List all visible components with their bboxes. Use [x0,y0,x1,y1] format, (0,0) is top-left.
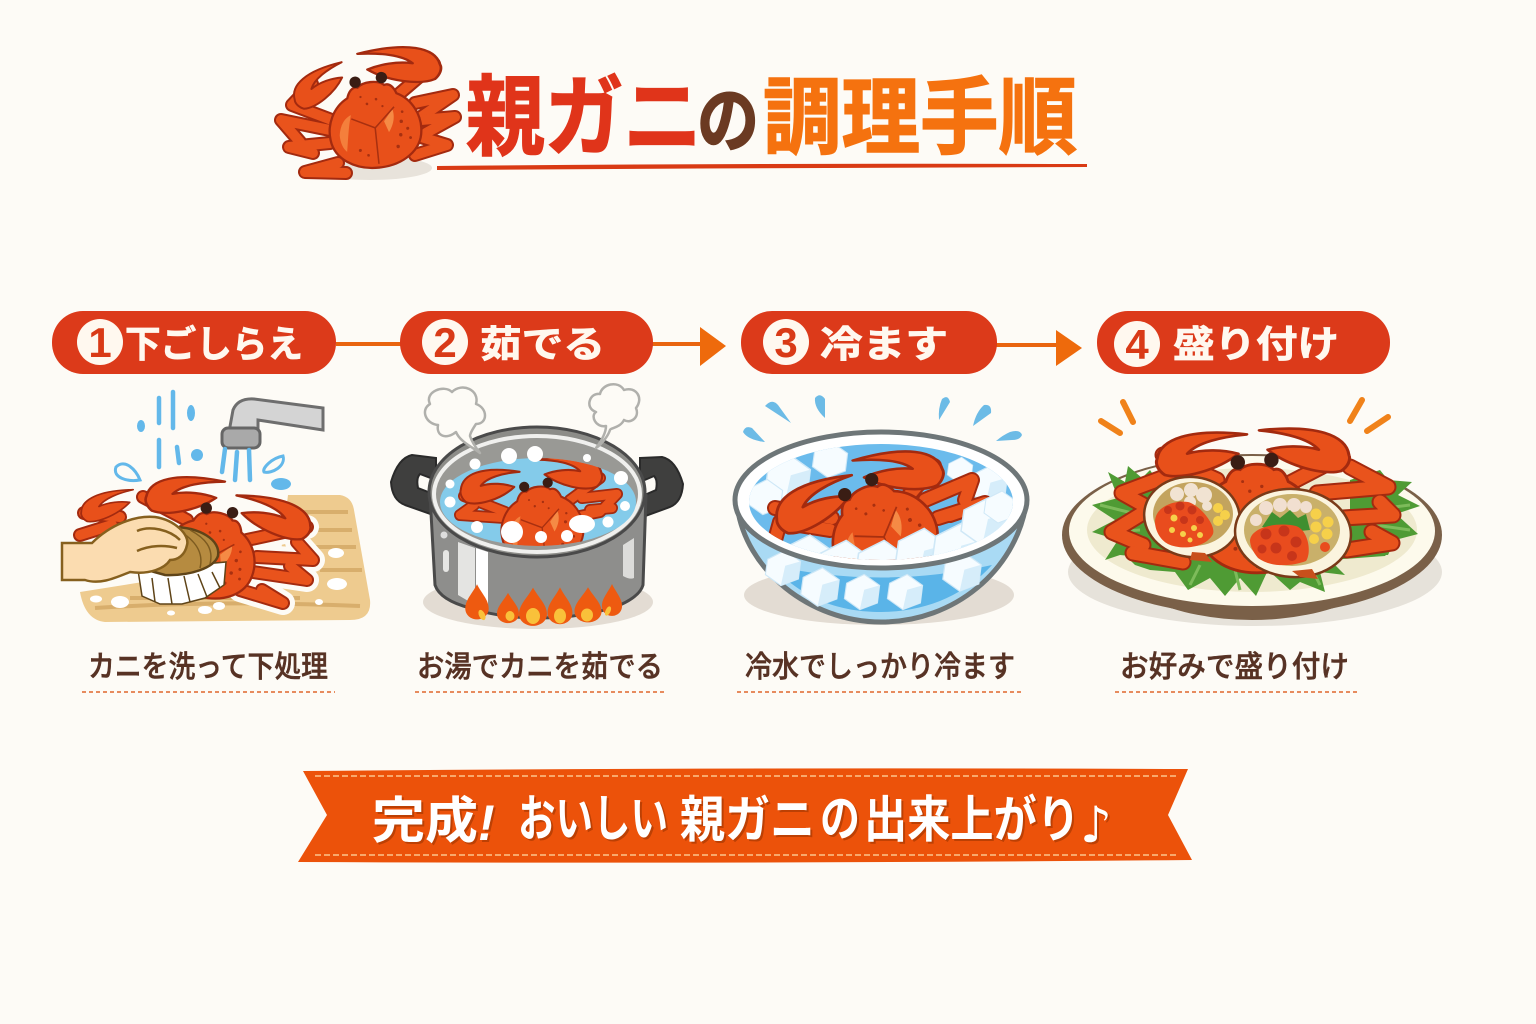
step 4 heading [1097,311,1390,374]
water drops [115,392,291,490]
step 1 heading: 1 [88,319,112,366]
sparkle marks [1101,400,1388,433]
step 3 heading: 冷ます [820,324,948,365]
completion banner: ♪ [1080,796,1112,854]
crab legs and claws [77,475,316,608]
step 1 heading: 下ごしらえ [125,324,303,365]
arrow: step 1 to 2 [336,342,402,346]
bowl body [737,505,1026,622]
chilled crab and ice [749,447,1013,560]
illustration: boiling pot [391,384,683,629]
title underline [437,164,1087,170]
title crab icon [281,47,455,180]
burner flames [465,584,622,626]
crab on plate [1112,423,1393,573]
completion banner [298,768,1192,863]
crab halo [80,497,313,603]
step 2 heading: 2 [433,319,457,366]
arrow: step 2 to 3 [650,327,726,366]
pot handles [391,455,683,518]
garnish leaves [1092,466,1420,596]
completion banner: 完成 [372,793,478,849]
title [466,68,1077,167]
arrow: step 3 to 4 [995,330,1082,366]
soap suds [90,548,347,616]
completion banner: ! [478,795,495,851]
infographic canvas [52,46,1442,863]
right shell with crab meat [1232,485,1354,581]
caption step 1: カニを洗って下処理 [88,651,328,684]
caption step 3: 冷水でしっかり冷ます [745,651,1015,684]
completion banner: 出来上がり [864,792,1080,848]
step 3 heading: 3 [774,319,798,366]
bubbles [444,446,630,543]
hand [62,517,187,582]
caption step 2: お湯でカニを茹でる [417,651,663,684]
plate [1062,454,1442,620]
illustration: washing the crab [62,392,370,622]
cutting board [80,495,370,622]
steam [425,384,639,453]
step 2 heading: 茹でる [480,324,605,365]
completion banner: 親ガニ [680,792,815,848]
pot rim and inside [429,427,645,557]
step 4 heading: 盛り付け [1173,324,1339,365]
caption step 4: お好みで盛り付け [1120,651,1349,684]
step 1 heading [52,311,336,374]
completion banner: おいしい [518,791,668,847]
bowl rim [735,432,1027,568]
left shell with crab meat [1139,471,1245,563]
title: 親ガニ [466,68,702,167]
scrub brush [138,527,226,604]
step 3 heading [741,311,997,374]
faucet [222,399,323,448]
step 4 heading: 4 [1125,321,1149,368]
pot body [430,495,646,618]
title: 調理手順 [763,71,1077,165]
splash marks [743,395,1022,442]
boiling crab [454,458,623,546]
title: の [697,82,759,162]
completion banner: の [820,791,860,847]
illustration: ice water bowl [735,395,1027,625]
illustration: plated crab [1062,400,1442,626]
step 2 heading [400,311,653,374]
